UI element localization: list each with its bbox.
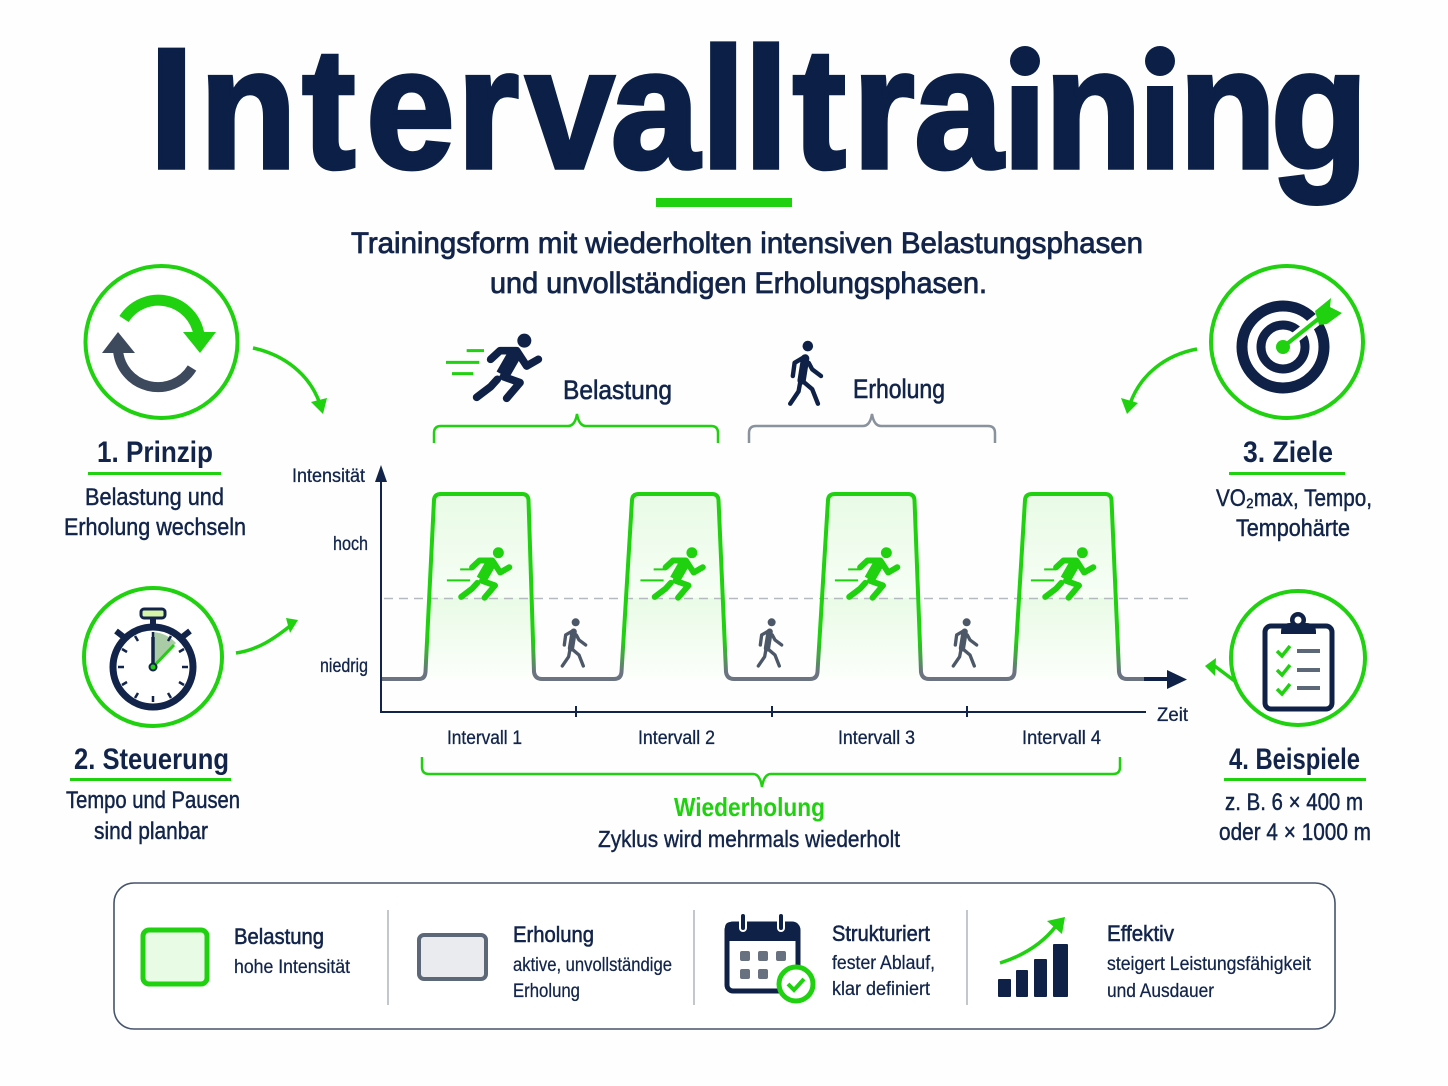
panel: legend: [114, 883, 1335, 1029]
heading underline: [88, 472, 221, 475]
subtitle: Trainingsform mit wiederholten intensiven Belastungsphasen: [351, 227, 1143, 260]
text: Effektiv detail: steigert Leistungsfähigkeit: [1107, 954, 1312, 975]
panel: 1. Prinzip: [64, 266, 246, 541]
heading: 1. Prinzip: 1. Prinzip: [97, 436, 213, 469]
subtitle: [351, 227, 1143, 300]
text: Ziele description: VO₂max, Tempo,: [1216, 485, 1372, 512]
threshold line: [384, 598, 1192, 600]
title underline: [656, 198, 792, 207]
arrow: Ziele to chart: [1121, 349, 1197, 414]
panel: 2. Steuerung: [66, 588, 240, 845]
icon: large runner: [446, 334, 538, 398]
text: Steuerung description: sind planbar: [94, 818, 208, 845]
text: Steuerung description: [66, 787, 240, 845]
icon: stopwatch: [84, 588, 222, 726]
swatch: Belastung: [143, 930, 207, 984]
icon: large walker: [790, 341, 821, 404]
icon: walker recovery 3: [953, 618, 977, 666]
bracket: Erholung: [749, 414, 995, 443]
text: Strukturiert detail: [832, 953, 935, 1000]
icon: runner interval 1: [447, 547, 509, 598]
text: Erholung detail: [513, 955, 672, 1002]
subtitle: und unvollständigen Erholungsphasen.: [490, 267, 987, 300]
text: Prinzip description: [64, 484, 246, 541]
legend item: Effektiv: [998, 917, 1312, 1002]
legend item: Belastung: [143, 924, 351, 984]
text: Beispiele description: [1219, 789, 1371, 846]
axes: [375, 465, 1146, 717]
chart fills lower: [426, 598, 1120, 679]
text: Erholung detail: aktive, unvollständige: [513, 955, 672, 976]
legend frame: [114, 883, 1335, 1029]
label: Wiederholung: Wiederholung: [674, 792, 825, 822]
axis label: niedrig: niedrig: [320, 656, 368, 677]
swatch: Erholung: [419, 935, 486, 979]
title: Intervalltraining: [149, 13, 1368, 204]
arrow: Steuerung to chart: [236, 618, 298, 653]
heading: 4. Beispiele: 4. Beispiele: [1229, 743, 1360, 776]
label: Erholung: Erholung: [853, 374, 945, 404]
arrow: Beispiele to chart: [1205, 658, 1236, 682]
heading underline: [70, 778, 231, 781]
label: Intervall 2: Intervall 2: [638, 728, 715, 749]
axis label: hoch: hoch: [333, 534, 368, 555]
heading: 2. Steuerung: 2. Steuerung: [74, 743, 229, 776]
text: Strukturiert detail: klar definiert: [832, 979, 931, 1000]
text: Effektiv detail: [1107, 954, 1312, 1002]
interval curve: [382, 494, 1146, 679]
icon: calendar with check: [725, 913, 813, 1001]
text: Prinzip description: Belastung und: [85, 484, 224, 511]
label: Intervall 1: Intervall 1: [447, 728, 522, 749]
icon: target with dart: [1211, 266, 1363, 418]
text: Beispiele description: z. B. 6 × 400 m: [1225, 789, 1363, 816]
icon: walker recovery 2: [758, 618, 782, 666]
icon: rising bar chart: [998, 917, 1068, 997]
label: Intervall 4: Intervall 4: [1022, 728, 1101, 749]
text: Effektiv detail: und Ausdauer: [1107, 981, 1215, 1002]
icon: clipboard checklist: [1231, 591, 1365, 725]
text: Erholung heading: Erholung: [513, 922, 594, 947]
icon: cycle arrows: [86, 266, 238, 418]
text: Belastung heading: Belastung: [234, 924, 324, 949]
text: Ziele description: [1216, 485, 1372, 542]
axis label: Intensität: Intensität: [292, 466, 366, 487]
icon: walker recovery 1: [562, 618, 586, 666]
label: Belastung: Belastung: [563, 375, 672, 405]
icon: runner interval 4: [1031, 547, 1093, 598]
text: Steuerung description: Tempo und Pausen: [66, 787, 240, 814]
text: Prinzip description: Erholung wechseln: [64, 514, 246, 541]
legend item: Erholung: [419, 922, 672, 1002]
text: Ziele description: Tempohärte: [1236, 515, 1350, 542]
text: Strukturiert detail: fester Ablauf,: [832, 953, 935, 974]
bracket: Belastung: [434, 414, 718, 443]
dividers: [388, 910, 967, 1005]
text: Beispiele description: oder 4 × 1000 m: [1219, 819, 1371, 846]
text: Belastung detail: hohe Intensität: [234, 957, 351, 978]
text: Erholung detail: Erholung: [513, 981, 580, 1002]
text: Zyklus: Zyklus wird mehrmals wiederholt: [598, 826, 901, 852]
icon: runner interval 2: [640, 547, 703, 598]
axis label: Zeit: Zeit: [1157, 705, 1189, 726]
icon: runner interval 3: [835, 547, 897, 598]
label: Intervall 3: Intervall 3: [838, 728, 915, 749]
chart: intensity over time: [292, 465, 1192, 749]
panel: 4. Beispiele: [1219, 591, 1371, 846]
heading: 3. Ziele: 3. Ziele: [1243, 436, 1333, 469]
bracket: Wiederholung: [422, 757, 1120, 787]
heading underline: [1229, 472, 1345, 475]
legend item: Strukturiert: [725, 913, 935, 1001]
text: Strukturiert heading: Strukturiert: [832, 921, 930, 946]
chart fills upper: [430, 494, 1115, 598]
arrow: Prinzip to chart: [253, 348, 327, 414]
time arrow: [1144, 670, 1187, 689]
text: Effektiv heading: Effektiv: [1107, 921, 1174, 946]
heading underline: [1224, 778, 1366, 781]
panel: 3. Ziele: [1211, 266, 1372, 542]
